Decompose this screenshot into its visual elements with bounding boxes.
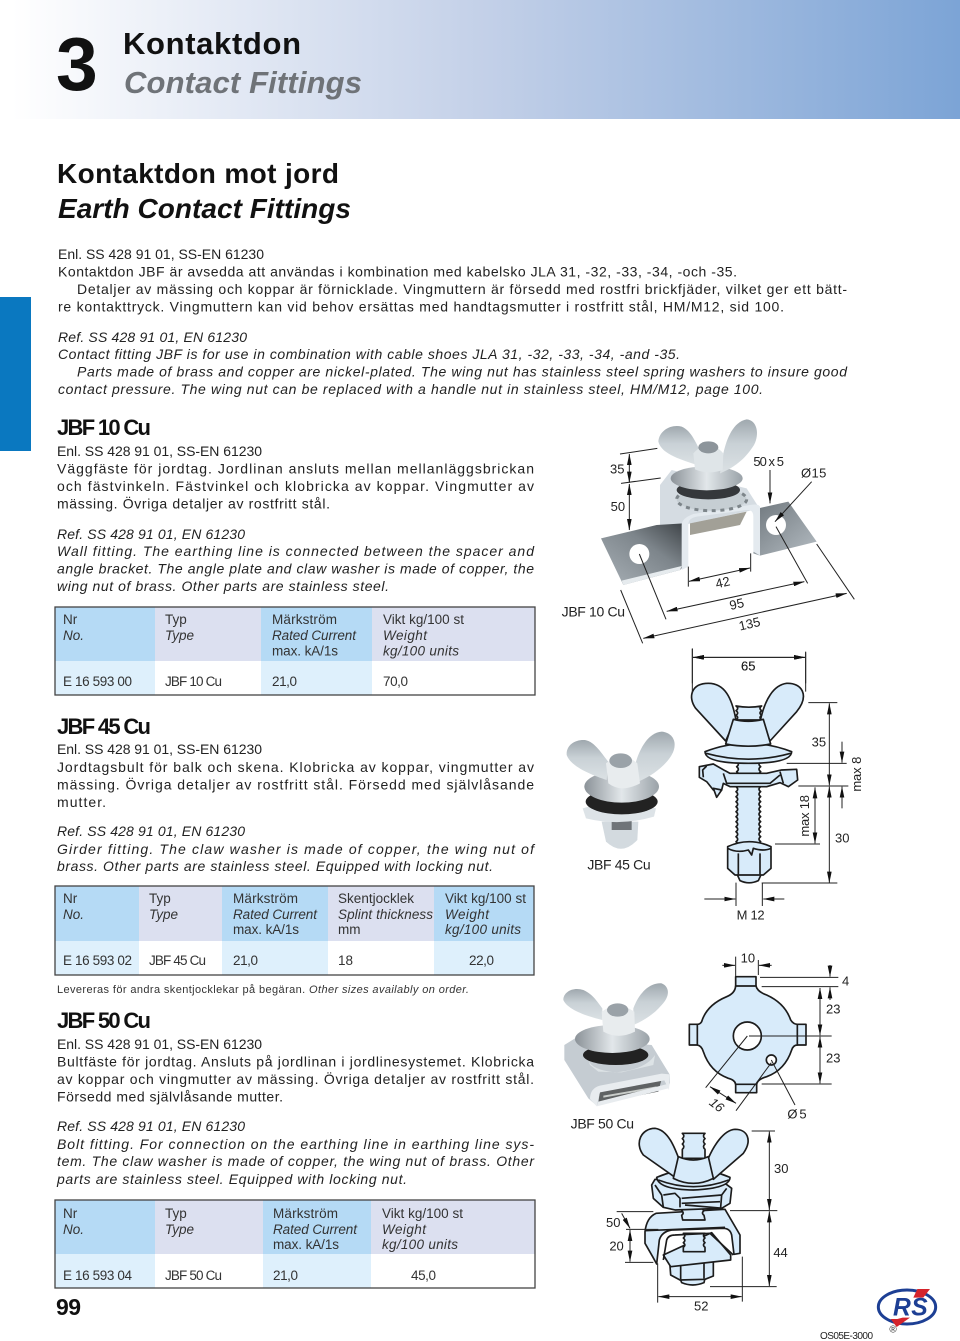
- description: JBF 10 Cu: och fästvinkeln. Fästvinkel och klobricka av koppar. Vingmutter av: [57, 478, 534, 494]
- description: JBF 45 Cu: [57, 741, 536, 874]
- bolt dimension labels: 35: [812, 735, 826, 750]
- clamp line drawing: [639, 1128, 748, 1285]
- clamp dimension labels: 50: [606, 1215, 620, 1230]
- logo: ®: [889, 1324, 897, 1335]
- description: JBF 50 Cu: Enl. SS 428 91 01, SS-EN 61230: [57, 1036, 262, 1052]
- description: JBF 50 Cu: parts are stainless steel. Equipped with locking nut.: [56, 1171, 407, 1187]
- dimension labels: 42: [714, 573, 731, 591]
- claw washer dimension labels: 4: [842, 973, 849, 988]
- table: JBF 45 Cu: E 16 593 02: [63, 953, 132, 968]
- table: JBF 10 Cu: Weight: [383, 628, 428, 643]
- description: JBF 50 Cu: av koppar och vingmutter av mässing. Övriga detaljer av rostfritt stål.: [57, 1070, 534, 1087]
- table: JBF 10 Cu: 70,0: [383, 674, 408, 689]
- description: JBF 45 Cu: brass. Other parts are stainless steel. Equipped with locking nut.: [57, 858, 493, 874]
- description: JBF 10 Cu: Enl. SS 428 91 01, SS-EN 61230: [57, 443, 262, 459]
- table: JBF 50 Cu: [55, 1200, 535, 1288]
- intro text: Swedish: Kontaktdon JBF är avsedda att användas i kombination med kabelsko JLA 31, -32, -33, -34, -och -35.: [58, 264, 737, 280]
- table: JBF 45 Cu: Märkström: [233, 891, 298, 906]
- logo: [878, 1289, 936, 1335]
- section heading: Earth Contact Fittings: [58, 193, 351, 224]
- table: JBF 45 Cu: Vikt kg/100 st: [445, 891, 526, 906]
- description: JBF 50 Cu: Ref. SS 428 91 01, EN 61230: [57, 1118, 245, 1134]
- chapter title: [123, 26, 362, 100]
- intro text: Swedish: [58, 246, 847, 314]
- table: JBF 45 Cu: kg/100 units: [445, 922, 521, 937]
- intro text: English: Ref. SS 428 91 01, EN 61230: [58, 329, 247, 345]
- table: JBF 45 Cu: Nr: [63, 891, 78, 906]
- bolt line drawing: [692, 683, 803, 883]
- description: JBF 45 Cu: mässing. Övriga detaljer av rostfritt stål. Försedd med självlåsande: [57, 776, 534, 792]
- table: JBF 50 Cu: Märkström: [273, 1206, 338, 1221]
- dimension labels: [562, 454, 826, 674]
- description: JBF 10 Cu: Väggfäste för jordtag. Jordlinan ansluts mellan mellanläggsbrickan: [57, 460, 534, 476]
- intro text: Swedish: re kontakttryck. Vingmuttern kan vid behov ersättas med handtagsmutter i rostfritt stål, HM/M12, sid 100.: [58, 298, 784, 314]
- clamp dimension labels: 44: [773, 1245, 788, 1260]
- heading: JBF 45 Cu: JBF 45 Cu: [57, 714, 151, 739]
- table: JBF 50 Cu: Nr: [63, 1206, 78, 1221]
- table: JBF 45 Cu: 22,0: [469, 953, 494, 968]
- table: JBF 50 Cu: Rated Current: [273, 1222, 358, 1237]
- table: JBF 45 Cu: Typ: [149, 891, 171, 906]
- chapter title: Kontaktdon: [123, 26, 301, 61]
- description: JBF 50 Cu: Bultfäste för jordtag. Ansluts på jordlinan i jordlinesystemet. Klobricka: [57, 1054, 534, 1070]
- section: JBF 50 Cu: [55, 1008, 535, 1288]
- intro text: English: Parts made of brass and copper are nickel-plated. The wing nut has stainless steel spring washers to insure good: [77, 364, 848, 380]
- section: JBF 45 Cu: [55, 714, 536, 996]
- bracket photo: [601, 419, 817, 585]
- claw washer dimension labels: 10: [741, 951, 755, 966]
- clamp photo label: JBF 50 Cu: [571, 1115, 634, 1131]
- bolt photo: [567, 732, 675, 849]
- table: JBF 10 Cu: Type: [165, 628, 194, 643]
- intro text: Swedish: Enl. SS 428 91 01, SS-EN 61230: [58, 246, 264, 262]
- claw washer dimension lines: [706, 957, 838, 1111]
- table: JBF 50 Cu: 21,0: [273, 1268, 298, 1283]
- clamp photo: [563, 983, 670, 1106]
- table: JBF 50 Cu: 45,0: [411, 1268, 436, 1283]
- table: JBF 10 Cu: E 16 593 00: [63, 674, 132, 689]
- dimension labels: Ø15: [801, 466, 826, 481]
- table: JBF 50 Cu: E 16 593 04: [63, 1268, 132, 1283]
- table: JBF 50 Cu: No.: [63, 1222, 84, 1237]
- table: JBF 10 Cu: [55, 607, 535, 695]
- description: JBF 10 Cu: mässing. Övriga detaljer av rostfritt stål.: [57, 494, 330, 512]
- description: JBF 10 Cu: Ref. SS 428 91 01, EN 61230: [57, 526, 245, 542]
- bolt dimension labels: 65: [741, 659, 755, 674]
- dimension labels: JBF 10 Cu: [562, 604, 625, 620]
- clamp dimension labels: [606, 1161, 788, 1313]
- heading: JBF 10 Cu: JBF 10 Cu: [57, 415, 151, 440]
- bolt dimension lines: [692, 648, 848, 906]
- table: JBF 10 Cu: kg/100 units: [383, 644, 459, 658]
- dimension lines: [620, 448, 854, 683]
- table: JBF 45 Cu: No.: [63, 907, 84, 922]
- description: JBF 50 Cu: tem. The claw washer is made of copper, the wing nut of brass. Other: [57, 1153, 535, 1169]
- table: JBF 50 Cu: max. kA/1s: [273, 1237, 339, 1252]
- description: JBF 50 Cu: [56, 1036, 535, 1187]
- chapter number: 3: [56, 22, 98, 106]
- claw washer dimension labels: 23: [826, 1051, 840, 1066]
- table: JBF 50 Cu: Weight: [382, 1222, 427, 1237]
- table: JBF 10 Cu: JBF 10 Cu: [165, 674, 222, 689]
- table: JBF 45 Cu: JBF 45 Cu: [149, 953, 206, 968]
- logo: RS: [893, 1295, 928, 1322]
- table: JBF 50 Cu: Typ: [165, 1206, 187, 1221]
- clamp dimension lines: [617, 1131, 777, 1303]
- heading: JBF 50 Cu: JBF 50 Cu: [57, 1008, 151, 1033]
- dimension labels: 65: [741, 659, 755, 674]
- description: JBF 50 Cu: Bolt fitting. For connection on the earthing line in earthing line sys-: [57, 1136, 534, 1152]
- table: JBF 10 Cu: Typ: [165, 612, 187, 627]
- table: JBF 45 Cu: Skentjocklek: [338, 891, 414, 906]
- table: JBF 45 Cu: mm: [338, 922, 360, 937]
- description: JBF 45 Cu: Ref. SS 428 91 01, EN 61230: [57, 823, 245, 839]
- table: JBF 45 Cu: Splint thickness: [338, 907, 433, 922]
- description: JBF 10 Cu: Wall fitting. The earthing line is connected between the spacer and: [57, 543, 535, 559]
- page number: 99: [56, 1294, 81, 1320]
- section heading: [57, 158, 351, 224]
- bolt photo label: JBF 45 Cu: [587, 856, 651, 872]
- table: JBF 10 Cu: Märkström: [272, 612, 337, 627]
- bolt dimension labels: M 12: [737, 908, 765, 923]
- description: JBF 45 Cu: Enl. SS 428 91 01, SS-EN 61230: [57, 741, 262, 757]
- claw washer dimension labels: 16: [706, 1095, 728, 1116]
- bolt dimension labels: 30: [835, 831, 849, 846]
- table: JBF 45 Cu: 18: [338, 953, 353, 968]
- intro text: English: [58, 329, 848, 397]
- note: other sizes: Levereras för andra skentjocklekar på begäran. Other sizes availably on order.: [57, 984, 469, 996]
- description: JBF 10 Cu: [57, 443, 535, 594]
- bolt dimension labels: max 8: [849, 757, 864, 792]
- table: JBF 10 Cu: No.: [63, 628, 84, 643]
- table: JBF 50 Cu: Vikt kg/100 st: [382, 1206, 463, 1221]
- table: JBF 45 Cu: Type: [149, 907, 178, 922]
- description: JBF 45 Cu: Jordtagsbult för balk och skena. Klobricka av koppar, vingmutter av: [57, 759, 534, 775]
- claw washer dimension labels: 23: [826, 1001, 840, 1016]
- dimension labels: 135: [737, 614, 762, 634]
- chapter title: Contact Fittings: [124, 65, 362, 100]
- dimension labels: 35: [610, 461, 624, 476]
- table: JBF 50 Cu: Type: [165, 1222, 194, 1237]
- claw washer dimension labels: Ø 5: [787, 1106, 807, 1121]
- diagram: JBF 45 Cu photo and drawing: [567, 648, 864, 923]
- claw washer dimension labels: [706, 951, 849, 1121]
- diagram: JBF 50 Cu photo and drawings: [563, 951, 849, 1313]
- clamp dimension labels: 52: [694, 1298, 708, 1313]
- table: JBF 10 Cu: Rated Current: [272, 628, 357, 643]
- description: JBF 10 Cu: wing nut of brass. Other parts are stainless steel.: [57, 578, 389, 594]
- dimension labels: 50 x 5: [753, 454, 784, 469]
- diagram: JBF 10 Cu bracket photo with dimensions: [562, 419, 854, 683]
- table: JBF 10 Cu: 21,0: [272, 674, 297, 689]
- table: JBF 45 Cu: Rated Current: [233, 907, 318, 922]
- intro text: English: contact pressure. The wing nut can be replaced with a handle nut in stainless steel, HM/M12, page 100.: [58, 381, 763, 397]
- header band: [12, 0, 960, 119]
- description: JBF 50 Cu: Försedd med självlåsande mutter.: [57, 1088, 283, 1104]
- table: JBF 45 Cu: Weight: [445, 907, 490, 922]
- intro text: Swedish: Detaljer av mässing och koppar är förnicklade. Vingmuttern är försedd med rostfri brickfjäder, vilket ger ett bätt-: [77, 281, 847, 297]
- table: JBF 10 Cu: Vikt kg/100 st: [383, 612, 464, 627]
- table: JBF 45 Cu: [55, 886, 534, 975]
- section: JBF 10 Cu: [55, 415, 535, 695]
- bolt dimension labels: max 18: [797, 795, 812, 837]
- table: JBF 10 Cu: max. kA/1s: [272, 644, 338, 658]
- description: JBF 45 Cu: Girder fitting. The claw washer is made of copper, the wing nut of: [57, 841, 536, 857]
- side tab: [0, 297, 31, 451]
- table: JBF 50 Cu: JBF 50 Cu: [165, 1268, 222, 1283]
- clamp dimension labels: 20: [609, 1238, 624, 1253]
- claw washer plan drawing: [689, 977, 806, 1093]
- description: JBF 45 Cu: mutter.: [57, 794, 106, 810]
- table: JBF 45 Cu: 21,0: [233, 953, 258, 968]
- dimension labels: 50: [611, 499, 625, 514]
- table: JBF 45 Cu: max. kA/1s: [233, 922, 299, 937]
- table: JBF 50 Cu: kg/100 units: [382, 1237, 458, 1252]
- bolt dimension labels: [737, 659, 864, 923]
- intro text: English: Contact fitting JBF is for use in combination with cable shoes JLA 31, -32, -33, -34, -and -35.: [58, 346, 680, 362]
- table: JBF 10 Cu: Nr: [63, 612, 78, 627]
- description: JBF 10 Cu: angle bracket. The angle plate and claw washer is made of copper, the: [57, 560, 534, 576]
- clamp dimension labels: 30: [774, 1161, 788, 1176]
- dimension labels: 95: [728, 595, 745, 613]
- section heading: Kontaktdon mot jord: [57, 158, 339, 189]
